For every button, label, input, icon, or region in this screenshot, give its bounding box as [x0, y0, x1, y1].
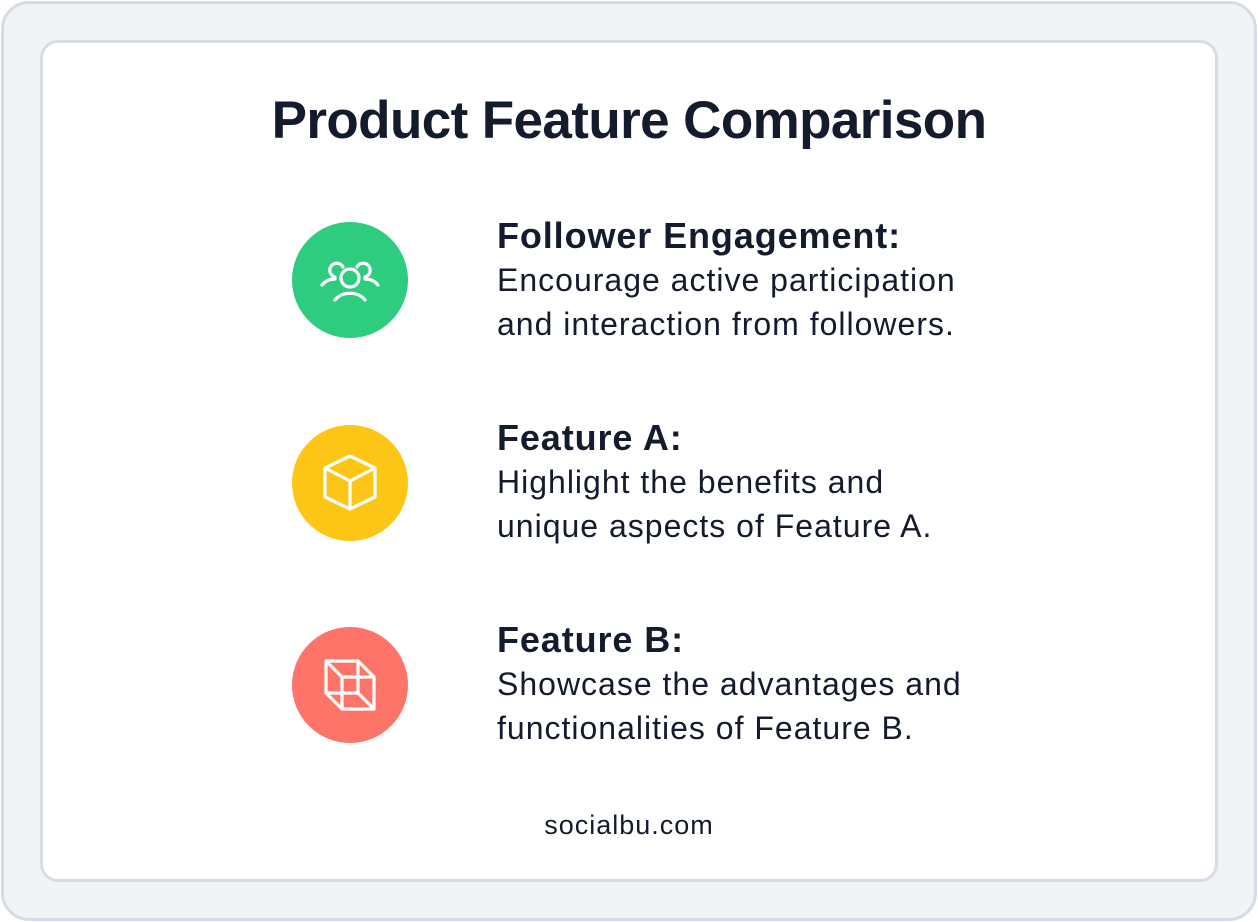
text: follower engagement: [497, 215, 956, 342]
title: Product Feature Comparison: [272, 91, 986, 150]
text: feature B: Feature B:: [497, 619, 684, 660]
text: feature A: unique aspects of Feature A.: [497, 508, 932, 544]
text: feature B: Showcase the advantages and: [497, 666, 962, 702]
footer: socialbu.com: [544, 810, 714, 840]
icon: cube: [292, 425, 408, 541]
text: follower engagement: and interaction from followers.: [497, 306, 955, 342]
text: feature A: Feature A:: [497, 417, 683, 458]
text: feature A: [497, 417, 932, 544]
icon: wireframe cube: [292, 627, 408, 743]
text: feature B: [497, 619, 962, 746]
text: follower engagement: Follower Engagement:: [497, 215, 901, 256]
text: feature A: Highlight the benefits and: [497, 464, 884, 500]
text: follower engagement: Encourage active participation: [497, 262, 956, 298]
icon: followers: [292, 222, 408, 338]
text: feature B: functionalities of Feature B.: [497, 710, 914, 746]
